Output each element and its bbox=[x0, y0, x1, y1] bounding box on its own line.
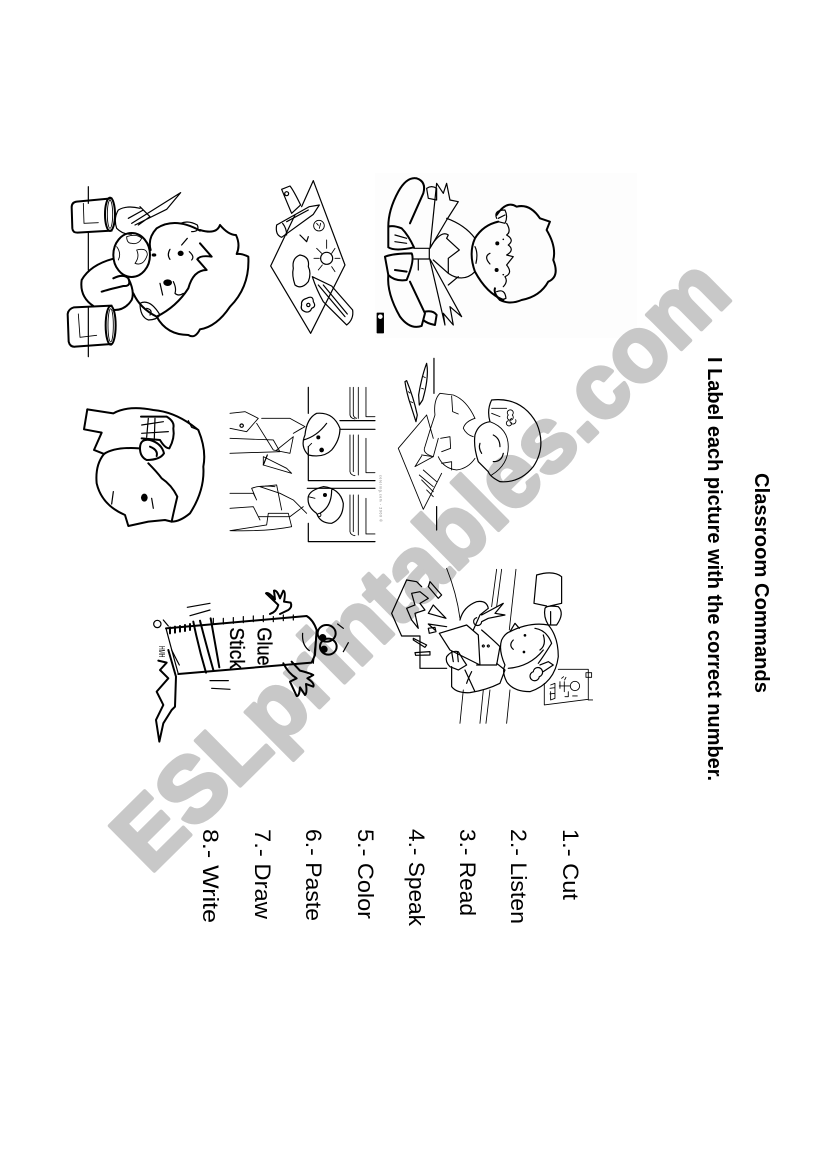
word list bbox=[198, 829, 583, 927]
word: 3 Read: 3.- Read bbox=[455, 829, 480, 916]
word: 2 Listen: 2.- Listen bbox=[506, 829, 531, 924]
watermark: ESLprintables.com bbox=[92, 239, 748, 889]
word: 1 Cut: 1.- Cut bbox=[558, 829, 583, 901]
picture: glue stick character bbox=[154, 590, 348, 742]
picture: girl doing crafts at a table bbox=[392, 568, 593, 723]
picture: glue stick character: Glue bbox=[252, 627, 275, 666]
word: 6 Paste: 6.- Paste bbox=[301, 829, 326, 921]
picture: glue stick character: HMH bbox=[157, 646, 166, 657]
picture: two students talking bbox=[230, 387, 382, 542]
word: 7 Draw: 7.- Draw bbox=[250, 829, 275, 920]
picture: two students talking: coloring.com - 2000 © bbox=[378, 475, 382, 522]
picture: paper with pencils and drawings bbox=[271, 181, 353, 333]
word: 4 Speak: 4.- Speak bbox=[404, 829, 429, 927]
picture: child painting a globe bbox=[68, 187, 248, 357]
word: 8 Write: 8.- Write bbox=[198, 829, 223, 923]
title: Classroom Commands bbox=[750, 473, 772, 693]
picture: child reading a book bbox=[377, 178, 556, 333]
word: 5 Color: 5.- Color bbox=[353, 829, 378, 920]
picture: glue stick character: Stick bbox=[225, 627, 247, 670]
picture: child listening with hand to ear bbox=[84, 408, 204, 526]
picture: girl writing at a desk bbox=[398, 358, 541, 530]
instruction: I Label each picture with the correct number. bbox=[703, 357, 725, 781]
